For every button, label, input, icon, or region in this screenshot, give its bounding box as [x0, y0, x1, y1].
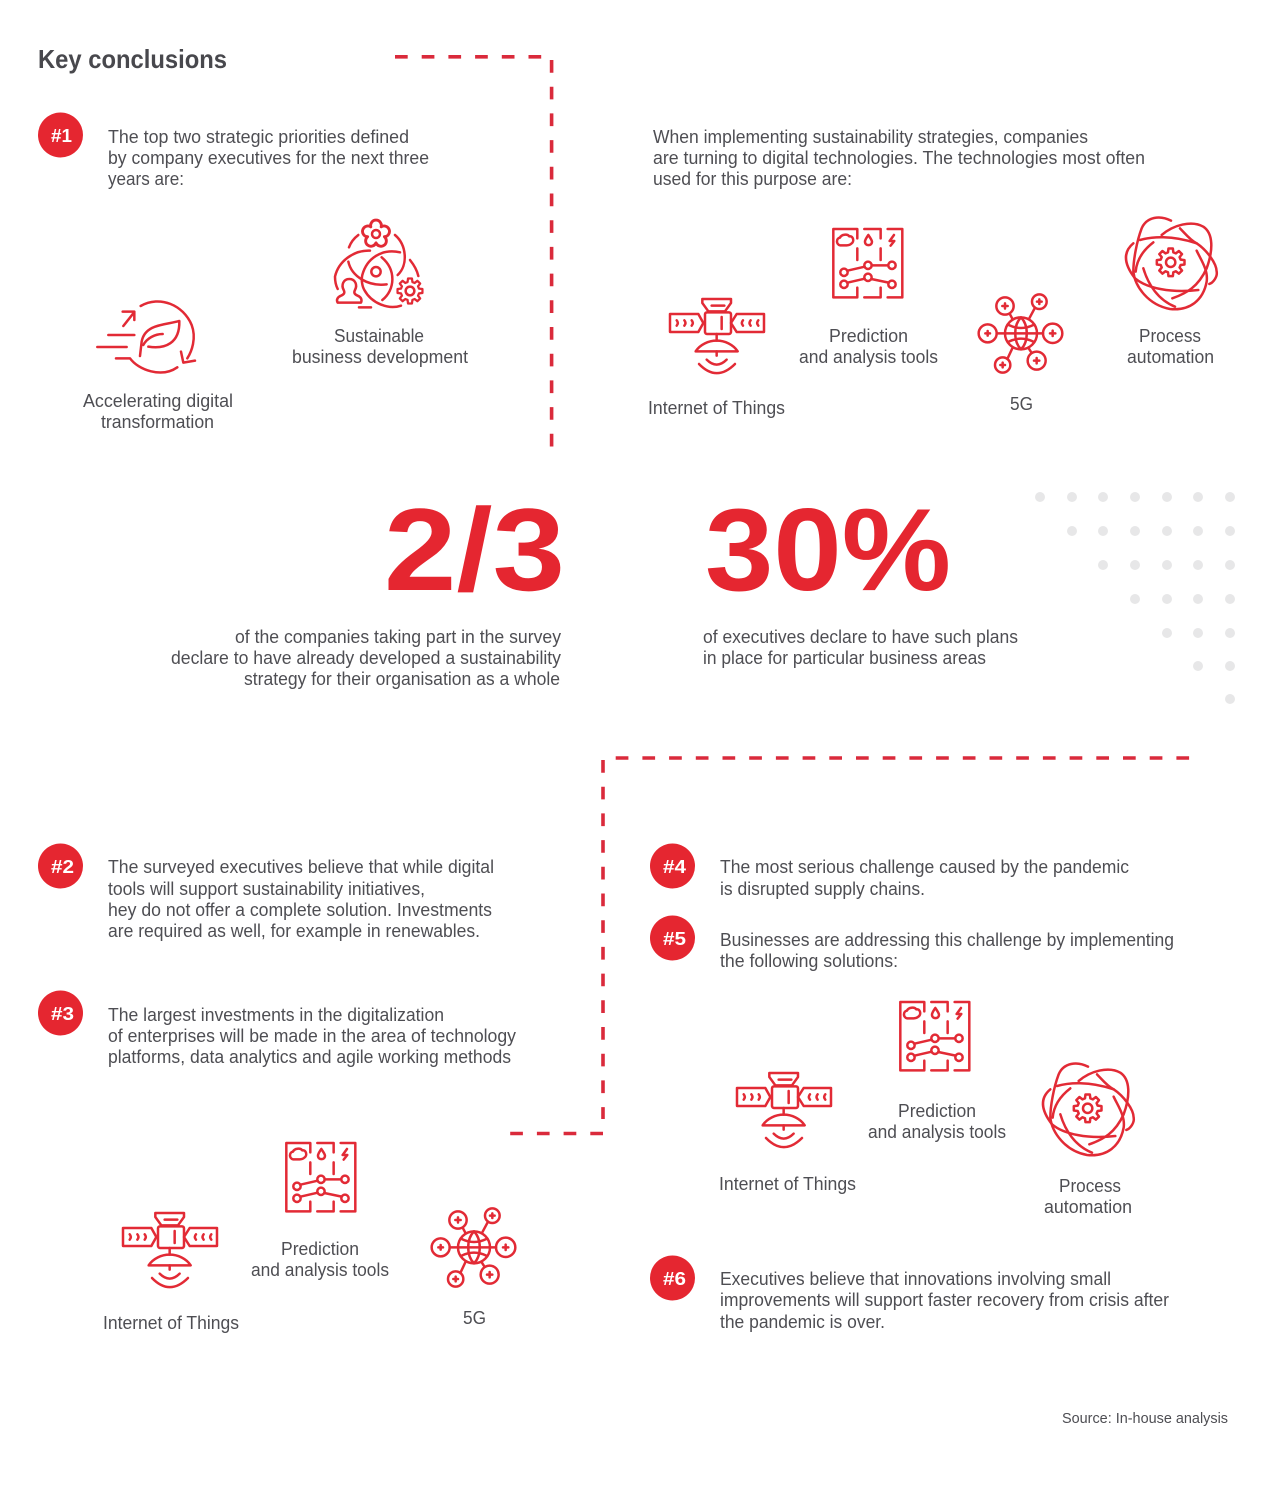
label: prediction and analysis tools: Prediction	[829, 326, 908, 346]
title: Key conclusions	[38, 44, 227, 74]
text block: conclusion 2: hey do not offer a complete solution. Investments	[108, 900, 492, 920]
panel: conclusions 2 and 3	[38, 844, 516, 1333]
label: sustainable business development: business development	[292, 347, 468, 367]
text block: conclusion 5	[720, 930, 1174, 971]
label: internet of things: Internet of Things	[103, 1313, 239, 1333]
icon: 5G	[979, 294, 1062, 373]
label: process automation: Process	[1059, 1176, 1121, 1196]
text block: conclusion 2: are required as well, for example in renewables.	[108, 921, 480, 941]
badge #4	[650, 844, 695, 888]
text block: conclusion 6: Executives believe that innovations involving small	[720, 1269, 1111, 1289]
label: internet of things: Internet of Things	[719, 1174, 856, 1194]
badge #2	[38, 844, 83, 888]
text block: digital technologies intro: are turning to digital technologies. The technologies most often	[653, 148, 1145, 168]
badge #6: #6	[663, 1269, 686, 1289]
text block: conclusion 1	[108, 127, 429, 189]
label: prediction and analysis tools	[799, 326, 938, 367]
badge #3: #3	[51, 1004, 74, 1024]
text block: 2/3 description: of the companies taking part in the survey	[235, 627, 561, 647]
text block: conclusion 1: The top two strategic priorities defined	[108, 127, 409, 147]
panel: key conclusions, top left	[38, 44, 468, 432]
text block: conclusion 6	[720, 1269, 1169, 1332]
badge #2: #2	[51, 857, 74, 877]
text block: conclusion 3: The largest investments in the digitalization	[108, 1005, 444, 1025]
badge #5	[650, 916, 695, 960]
text block: conclusion 3	[108, 1005, 516, 1067]
text block: conclusion 6: improvements will support faster recovery from crisis after	[720, 1290, 1169, 1310]
badge #4: #4	[663, 857, 686, 877]
label: process automation	[1127, 326, 1214, 367]
icon: 5G	[432, 1208, 515, 1287]
decorative dot grid	[1035, 492, 1235, 704]
panel: statistic 30%	[703, 484, 1018, 668]
label: 5G: 5G	[463, 1308, 486, 1328]
label: process automation: automation	[1044, 1197, 1132, 1217]
label: prediction and analysis tools: and analysis tools	[799, 347, 938, 367]
label: accelerating digital transformation	[83, 391, 233, 432]
badge #5: #5	[663, 929, 686, 949]
text block: conclusion 1: years are:	[108, 169, 184, 189]
text block: conclusion 2	[108, 857, 494, 941]
label: prediction and analysis tools: and analysis tools	[868, 1122, 1006, 1142]
source note: Source: In-house analysis	[1062, 1411, 1228, 1427]
text block: conclusion 3: of enterprises will be made in the area of technology	[108, 1026, 516, 1046]
text block: conclusion 3: platforms, data analytics and agile working methods	[108, 1047, 511, 1067]
icon: internet of things	[670, 299, 764, 373]
text block: conclusion 5: Businesses are addressing this challenge by implementing	[720, 930, 1174, 950]
label: internet of things: Internet of Things	[648, 398, 785, 418]
text block: digital technologies intro: When implementing sustainability strategies, companies	[653, 127, 1088, 147]
label: process automation: automation	[1127, 347, 1214, 367]
label: 5G: 5G	[1010, 394, 1033, 414]
icon: prediction and analysis tools	[900, 1002, 969, 1070]
icon: accelerating digital transformation	[97, 301, 195, 372]
label: sustainable business development	[292, 326, 468, 367]
text block: 30% description: in place for particular business areas	[703, 648, 986, 668]
label: sustainable business development: Sustainable	[334, 326, 424, 346]
label: prediction and analysis tools: Prediction	[281, 1239, 359, 1259]
label: prediction and analysis tools	[251, 1239, 389, 1280]
label: accelerating digital transformation: Accelerating digital	[83, 391, 233, 411]
text block: 30% description: of executives declare to have such plans	[703, 627, 1018, 647]
panel: conclusions 4, 5 and 6	[650, 844, 1174, 1332]
label: prediction and analysis tools	[868, 1101, 1006, 1142]
dashed connector: top	[395, 57, 552, 447]
text block: conclusion 4: is disrupted supply chains.	[720, 879, 925, 899]
dashed connector: middle	[510, 758, 1190, 1134]
badge #1: #1	[51, 126, 72, 146]
text block: conclusion 6: the pandemic is over.	[720, 1312, 885, 1332]
text block: conclusion 2: tools will support sustainability initiatives,	[108, 879, 425, 899]
text block: conclusion 5: the following solutions:	[720, 951, 898, 971]
label: prediction and analysis tools: and analysis tools	[251, 1260, 389, 1280]
label: prediction and analysis tools: Prediction	[898, 1101, 976, 1121]
text block: conclusion 1: by company executives for the next three	[108, 148, 429, 168]
text block: conclusion 2: The surveyed executives believe that while digital	[108, 857, 494, 877]
text block: conclusion 4	[720, 857, 1129, 899]
text block: 2/3 description: strategy for their organisation as a whole	[244, 669, 560, 689]
text block: 2/3 description: declare to have already developed a sustainability	[171, 648, 561, 668]
icon: internet of things	[737, 1073, 831, 1147]
icon: process automation	[1043, 1064, 1134, 1155]
icon: prediction and analysis tools	[286, 1143, 355, 1211]
icon: sustainable business development	[335, 220, 422, 307]
text block: conclusion 4: The most serious challenge caused by the pandemic	[720, 857, 1129, 877]
badge #1	[38, 112, 83, 158]
big number: 2/3: 2/3	[384, 484, 565, 615]
label: process automation	[1044, 1176, 1132, 1217]
icon: internet of things	[123, 1213, 217, 1287]
label: process automation: Process	[1139, 326, 1201, 346]
icon: process automation	[1126, 218, 1217, 309]
icon: prediction and analysis tools	[833, 229, 902, 297]
text block: digital technologies intro	[653, 127, 1145, 189]
text block: digital technologies intro: used for this purpose are:	[653, 169, 852, 189]
big number: 30%: 30%	[705, 484, 951, 615]
text block: 30% description	[703, 627, 1018, 668]
panel: statistic 2/3	[171, 484, 565, 689]
text block: 2/3 description	[171, 627, 561, 689]
badge #3	[38, 990, 83, 1036]
label: accelerating digital transformation: transformation	[101, 412, 214, 432]
panel: digital technologies, top right	[648, 127, 1217, 418]
badge #6	[650, 1256, 695, 1300]
